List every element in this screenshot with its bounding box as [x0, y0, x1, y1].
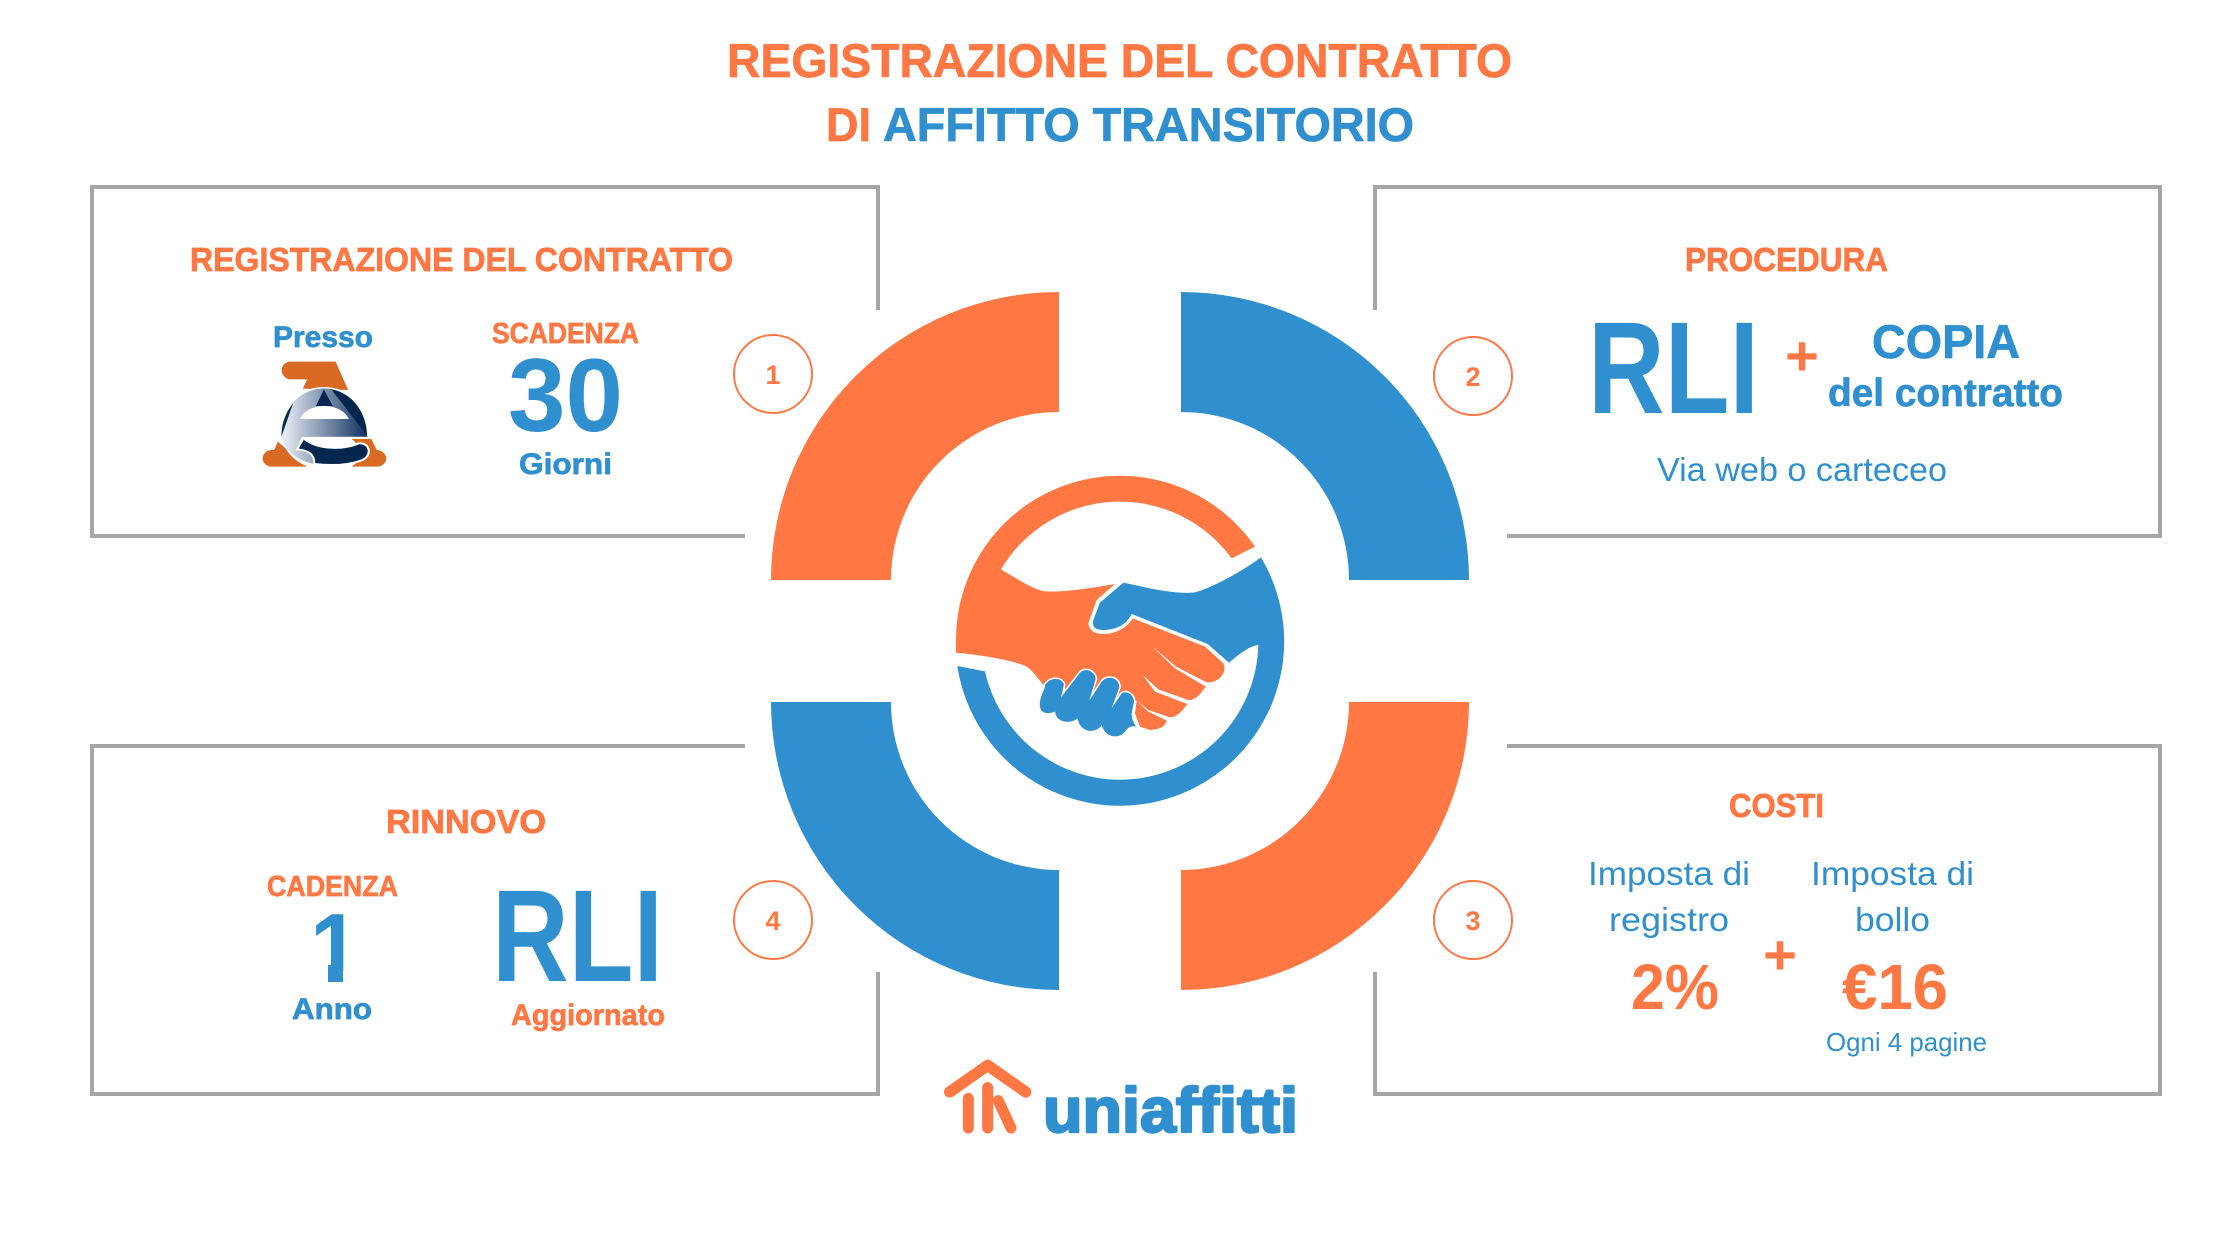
- step 4: 4: [765, 906, 781, 936]
- label: cadenza: CADENZA: [267, 871, 398, 903]
- step 1: [734, 335, 812, 413]
- step 3: 3: [1465, 906, 1481, 936]
- wordmark: uniaffitti: [1043, 1076, 1298, 1146]
- step 2: [1434, 337, 1512, 415]
- step 4: [734, 881, 812, 959]
- heading: registrazione: REGISTRAZIONE DEL CONTRATTO: [190, 241, 733, 278]
- RLI: RLI: [1588, 294, 1759, 441]
- step 1: 1: [765, 360, 781, 390]
- icon: handshake: [956, 476, 1284, 806]
- label: aggiornato: Aggiornato: [511, 999, 665, 1032]
- plus: +: [1785, 324, 1819, 387]
- number: 30: 30: [508, 338, 623, 454]
- title: REGISTRAZIONE DEL CONTRATTO: [727, 34, 1512, 87]
- panel: registrazione del contratto: [92, 187, 878, 536]
- imposta di bollo: Imposta di: [1811, 855, 1974, 892]
- panel: costi: [1375, 746, 2160, 1094]
- RLI: RLI: [492, 862, 663, 1009]
- ring segment: top right: [1181, 292, 1469, 580]
- title: [727, 34, 1512, 151]
- via web o carteceo: Via web o carteceo: [1657, 451, 1947, 488]
- ogni 4 pagine: Ogni 4 pagine: [1826, 1027, 1987, 1057]
- 16 euro: €16: [1842, 951, 1948, 1023]
- title: DI: [826, 98, 871, 151]
- ring segment: bottom left: [771, 702, 1059, 990]
- icon: house: [950, 1065, 1026, 1128]
- ring segment: top left: [771, 292, 1059, 580]
- icon: agenzia delle entrate logo: [263, 362, 386, 470]
- imposta di bollo: [1811, 855, 1974, 938]
- label: scadenza: SCADENZA: [492, 318, 639, 350]
- heading: rinnovo: RINNOVO: [386, 803, 546, 840]
- step 3: [1434, 881, 1512, 959]
- plus: +: [1763, 923, 1797, 986]
- label: presso: Presso: [273, 321, 373, 354]
- imposta di registro: Imposta di: [1588, 855, 1750, 892]
- heading: procedura: PROCEDURA: [1685, 241, 1888, 278]
- blue fingers: [1040, 670, 1136, 736]
- orange hand and arc: [956, 476, 1255, 730]
- label: anno: Anno: [292, 993, 372, 1026]
- step 2: 2: [1465, 362, 1481, 392]
- imposta di bollo: bollo: [1855, 901, 1930, 938]
- panel: rinnovo: [92, 746, 878, 1094]
- imposta di registro: registro: [1609, 901, 1729, 938]
- copia: COPIA: [1872, 315, 2020, 368]
- imposta di registro: [1588, 855, 1750, 938]
- title: AFFITTO TRANSITORIO: [883, 98, 1414, 151]
- 2 percent: 2%: [1631, 951, 1719, 1023]
- blue hand and arc: [957, 557, 1284, 806]
- del contratto: del contratto: [1828, 372, 2063, 415]
- number: 1: [316, 914, 344, 982]
- panel: procedura: [1375, 187, 2160, 536]
- number: 1: 1: [310, 893, 360, 1003]
- logo: uniaffitti: [950, 1065, 1298, 1146]
- label: giorni: Giorni: [519, 448, 612, 481]
- heading: costi: COSTI: [1729, 787, 1824, 824]
- ring segment: bottom right: [1181, 702, 1469, 990]
